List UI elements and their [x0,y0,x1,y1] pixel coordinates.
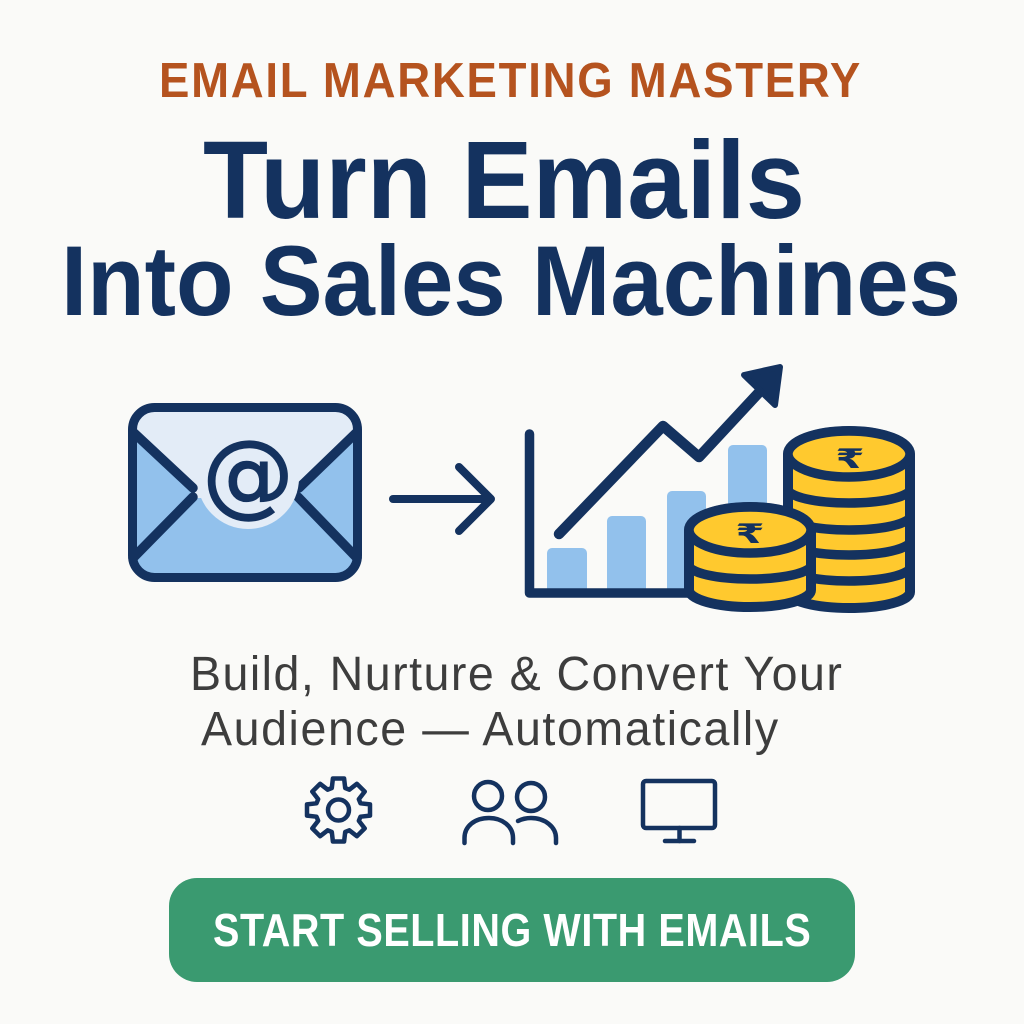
envelope seams [133,432,357,558]
rupee symbol: ₹ [835,444,865,475]
bar 2 [607,516,646,589]
call to action button [169,878,855,982]
chart axes [530,434,700,593]
small stack top coin [689,507,811,553]
icon: envelope with at sign [132,408,358,578]
subtitle line 1: Build, Nurture & Convert Your [190,647,842,701]
title line 2: Into Sales Machines [61,225,961,336]
subtitle line 2: Audience — Automatically [201,702,779,756]
icon: gear [307,778,370,842]
rupee symbol: ₹ [735,519,765,550]
bar 3 [667,491,706,589]
icon: monitor [643,781,715,841]
main title [61,119,961,336]
subtitle [190,647,842,756]
trend arrowhead [744,367,780,405]
icon: small coin stack [689,507,811,607]
button label: START SELLING WITH EMAILS [213,905,811,957]
icon: people [464,782,556,843]
envelope medallion [197,427,299,529]
bar 1 [547,548,587,589]
icon: large coin stack [788,431,910,608]
trend line [559,386,765,534]
large stack top coin [788,431,910,477]
arrow: email to results [393,467,491,531]
title line 1: Turn Emails [203,119,805,242]
envelope bottom fold [135,498,355,577]
envelope outline [132,408,358,578]
eyebrow heading: EMAIL MARKETING MASTERY [159,54,860,108]
at sign: @ [202,422,294,527]
growth chart [530,367,780,593]
envelope left fold [134,437,193,553]
envelope right fold [299,437,356,553]
bar 4 [728,445,767,520]
